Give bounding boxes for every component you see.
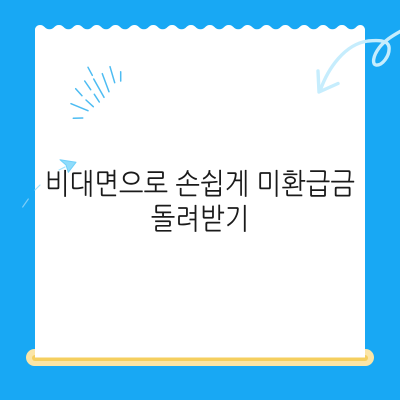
white paper card with scalloped top bbox=[35, 25, 365, 358]
yellow bar under card bbox=[26, 349, 374, 366]
icon: paper plane with dashed trail bbox=[23, 160, 76, 207]
icon: curly arrow bbox=[318, 31, 400, 92]
title text bbox=[45, 167, 355, 235]
title text: 돌려받기 bbox=[151, 202, 249, 235]
icon: sunburst lines bbox=[71, 67, 121, 118]
title text: 비대면으로 손쉽게 미환급금 bbox=[45, 167, 355, 201]
